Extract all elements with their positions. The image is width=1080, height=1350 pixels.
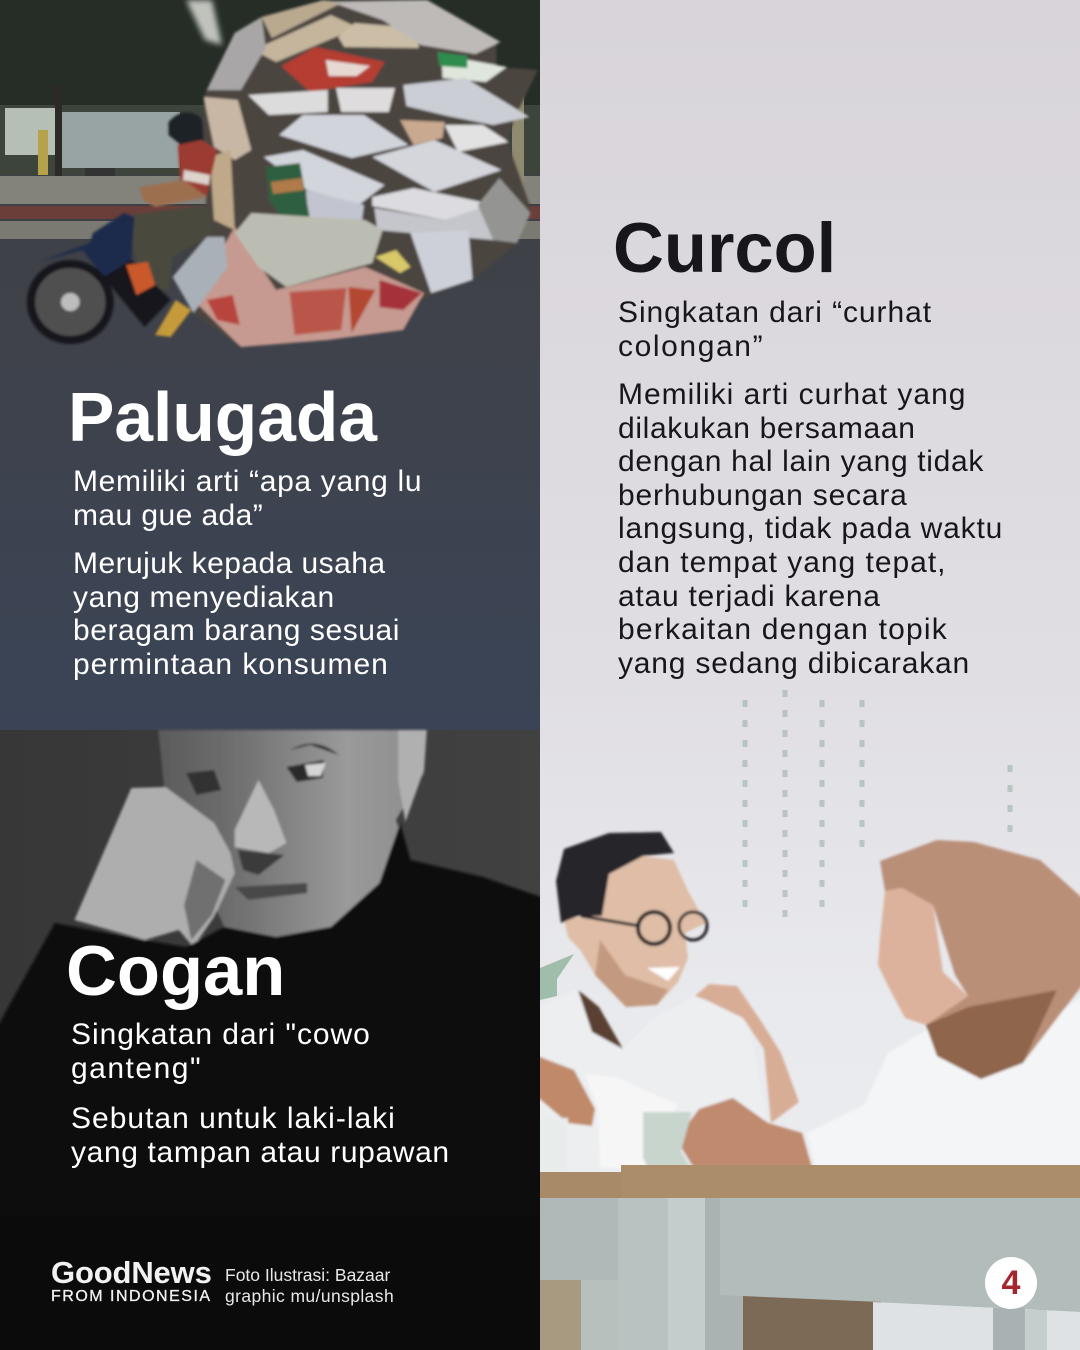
panel: Cogan bbox=[66, 931, 450, 1169]
text block: Curcol meaning: yang sedang dibicarakan bbox=[618, 647, 970, 680]
text block: Curcol description: colongan” bbox=[618, 330, 764, 363]
text block: Cogan meaning: yang tampan atau rupawan bbox=[71, 1136, 450, 1169]
text block: Palugada meaning bbox=[73, 547, 400, 681]
text block: Palugada meaning: beragam barang sesuai bbox=[73, 614, 400, 647]
text block: Curcol meaning: dan tempat yang tepat, bbox=[618, 546, 946, 579]
woman figure bbox=[681, 840, 1080, 1170]
photo: motorcycle with oversized load bbox=[0, 0, 540, 730]
text block: Curcol meaning: Memiliki arti curhat yang bbox=[618, 378, 966, 411]
page number badge bbox=[985, 1257, 1037, 1309]
text block: Palugada description bbox=[73, 465, 422, 532]
text block: Curcol description: Singkatan dari “curhat bbox=[618, 296, 932, 329]
text block: Curcol meaning: dengan hal lain yang tidak bbox=[618, 445, 984, 478]
logo: GoodNews from Indonesia: GoodNews bbox=[51, 1255, 212, 1290]
text block: Palugada meaning: permintaan konsumen bbox=[73, 648, 389, 681]
man figure bbox=[530, 832, 768, 1172]
heading: Curcol: Curcol bbox=[613, 208, 836, 287]
photo: man in black turtleneck bbox=[0, 730, 579, 1350]
text block: Curcol meaning: dilakukan bersamaan bbox=[618, 412, 916, 445]
page number badge: 4 bbox=[1002, 1264, 1020, 1302]
text block: Palugada meaning: yang menyediakan bbox=[73, 581, 335, 614]
text block: Curcol meaning bbox=[618, 378, 1003, 680]
text block: Curcol meaning: langsung, tidak pada waktu bbox=[618, 512, 1003, 545]
panel: Curcol bbox=[613, 208, 1003, 680]
photo credit: Foto Ilustrasi: Bazaar bbox=[225, 1265, 390, 1285]
text block: Curcol meaning: atau terjadi karena bbox=[618, 580, 881, 613]
photo credit bbox=[225, 1265, 394, 1306]
text block: Cogan description: Singkatan dari "cowo bbox=[71, 1018, 371, 1051]
text block: Curcol meaning: berhubungan secara bbox=[618, 479, 908, 512]
motorcyclist bbox=[31, 112, 217, 340]
text block: Cogan meaning: Sebutan untuk laki-laki bbox=[71, 1102, 396, 1135]
text block: Palugada description: Memiliki arti “apa yang lu bbox=[73, 465, 422, 498]
heading: Palugada: Palugada bbox=[68, 378, 377, 456]
photo credit: graphic mu/unsplash bbox=[225, 1286, 394, 1306]
text block: Cogan meaning bbox=[71, 1102, 450, 1169]
text block: Palugada meaning: Merujuk kepada usaha bbox=[73, 547, 386, 580]
logo: GoodNews from Indonesia: FROM INDONESIA bbox=[51, 1288, 212, 1305]
text block: Curcol meaning: berkaitan dengan topik bbox=[618, 613, 948, 646]
panel: Palugada bbox=[68, 378, 422, 681]
text block: Curcol description bbox=[618, 296, 932, 363]
photo: couple chatting at a table bbox=[530, 0, 1080, 1350]
text block: Cogan description: ganteng" bbox=[71, 1052, 202, 1085]
heading: Cogan: Cogan bbox=[66, 931, 285, 1010]
text block: Cogan description bbox=[71, 1018, 371, 1085]
text block: Palugada description: mau gue ada” bbox=[73, 499, 263, 532]
